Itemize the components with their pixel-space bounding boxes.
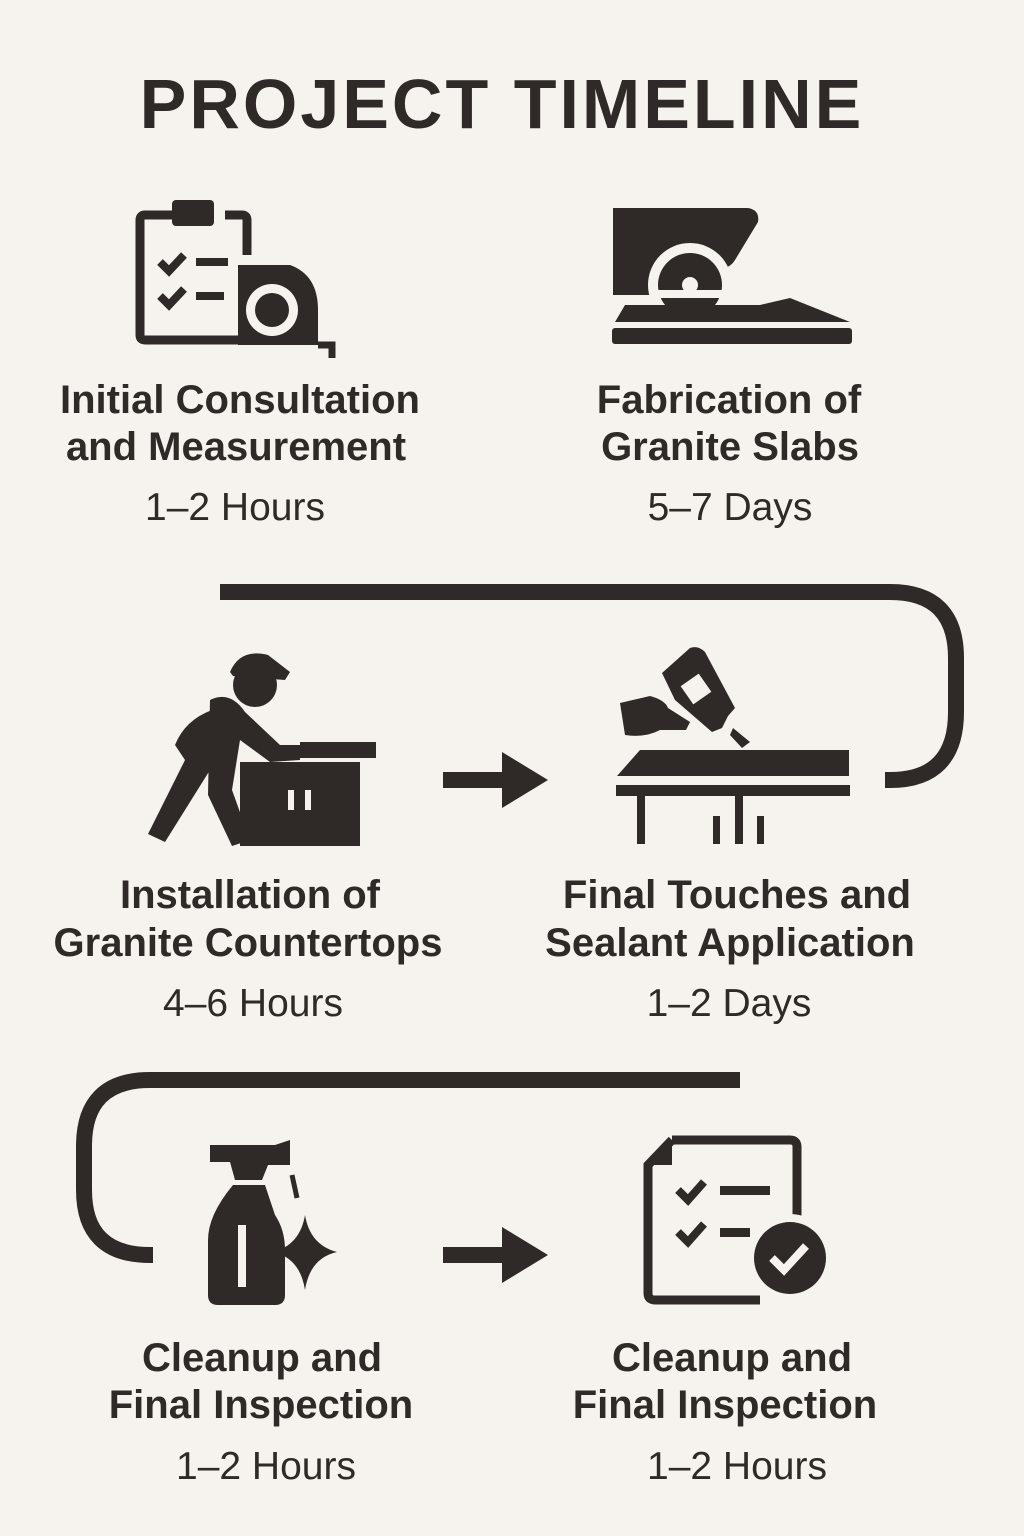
icon: worker installing countertop bbox=[148, 653, 376, 846]
step 3: installation: Installation of bbox=[120, 873, 381, 917]
step 4: final touches bbox=[545, 647, 915, 1025]
icon: clipboard and tape measure bbox=[140, 200, 332, 358]
step 3: installation bbox=[54, 653, 442, 1025]
step 1: initial consultation: and Measurement bbox=[66, 425, 406, 469]
step 4: final touches: 1–2 Days bbox=[647, 982, 811, 1025]
connector arrow row 1 to row 2 bbox=[220, 592, 956, 780]
title: PROJECT TIMELINE bbox=[140, 65, 864, 143]
step 3: installation: 4–6 Hours bbox=[163, 982, 343, 1025]
arrow right row 3 bbox=[443, 1227, 548, 1283]
step 2: fabrication: Fabrication of bbox=[597, 378, 862, 422]
icon: spray bottle with sparkle bbox=[208, 1140, 337, 1305]
step 1: initial consultation bbox=[60, 200, 420, 529]
step 4: final touches: Final Touches and bbox=[563, 873, 911, 917]
icon: saw cutting slab bbox=[612, 208, 852, 344]
step 1: initial consultation: 1–2 Hours bbox=[145, 486, 325, 529]
step 4: final touches: Sealant Application bbox=[545, 921, 915, 965]
connector arrow row 2 to row 3 bbox=[84, 1080, 740, 1255]
step 3: installation: Granite Countertops bbox=[54, 921, 442, 965]
step 5: cleanup bbox=[109, 1140, 413, 1488]
step 6: final inspection: 1–2 Hours bbox=[647, 1445, 827, 1488]
step 2: fabrication: 5–7 Days bbox=[648, 486, 812, 529]
step 6: final inspection: Final Inspection bbox=[573, 1383, 877, 1427]
step 2: fabrication bbox=[597, 208, 862, 529]
icon: sealant bottle over table bbox=[616, 647, 850, 844]
step 2: fabrication: Granite Slabs bbox=[601, 425, 859, 469]
step 6: final inspection bbox=[573, 1140, 877, 1488]
step 6: final inspection: Cleanup and bbox=[612, 1336, 852, 1380]
step 5: cleanup: Final Inspection bbox=[109, 1383, 413, 1427]
arrow right row 2 bbox=[443, 752, 548, 808]
icon: checklist with check badge bbox=[648, 1140, 834, 1302]
step 5: cleanup: Cleanup and bbox=[142, 1336, 382, 1380]
step 5: cleanup: 1–2 Hours bbox=[176, 1445, 356, 1488]
step 1: initial consultation: Initial Consultation bbox=[60, 378, 420, 422]
